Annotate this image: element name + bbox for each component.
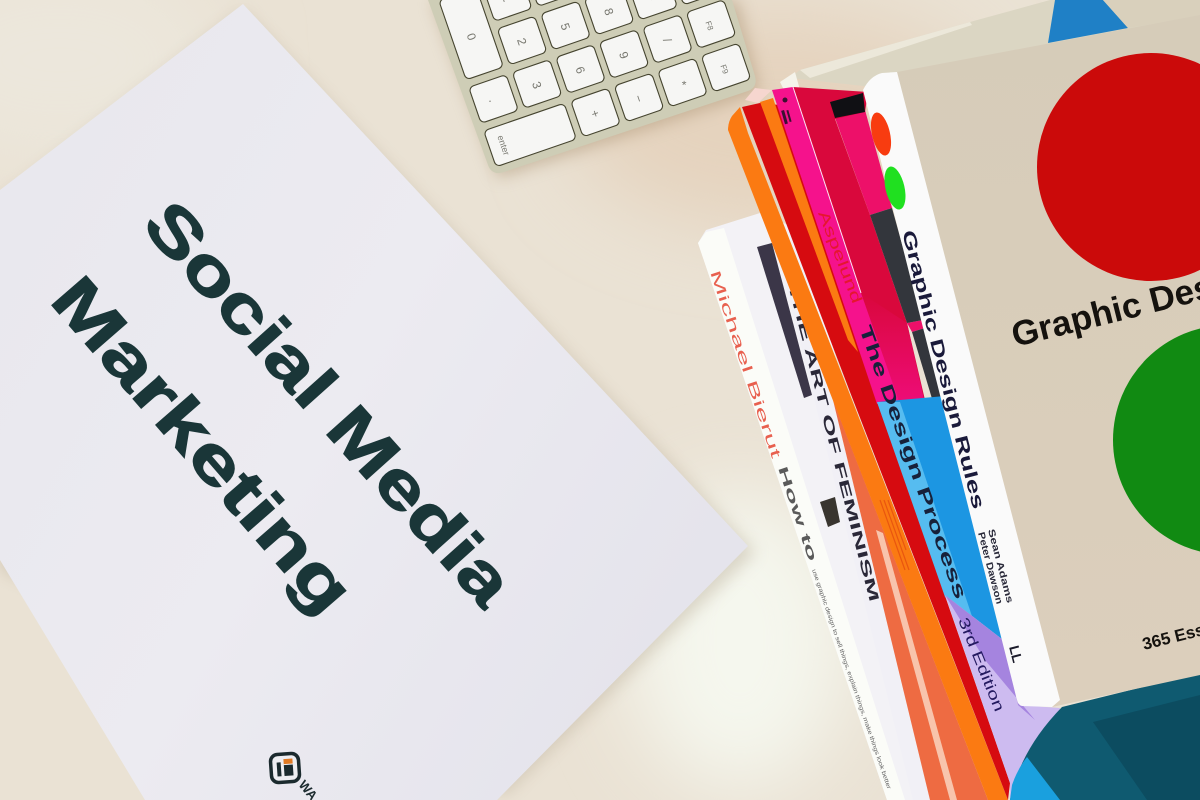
key labels: . bbox=[486, 96, 500, 104]
key labels bbox=[453, 0, 732, 157]
spine authors: Sean Adams bbox=[985, 528, 1015, 604]
spine text: 3rd Edition: 3rd Edition bbox=[954, 615, 1008, 714]
purple section bbox=[945, 595, 1060, 800]
spine title: THE ART OF FEMINISM bbox=[785, 282, 883, 603]
spine subtitle: use graphic design to sell things, explain things, make things look better bbox=[810, 569, 891, 790]
teal cover bbox=[1010, 673, 1200, 800]
coral book edge bbox=[833, 400, 988, 800]
pink cover bbox=[835, 110, 892, 215]
book: Graphic Design Rules bbox=[863, 15, 1200, 707]
back book with blue triangle bbox=[780, 0, 1200, 92]
heading: Social Media: Social Media bbox=[130, 186, 530, 621]
key labels: 6 bbox=[572, 65, 588, 76]
cover dark rectangle bbox=[757, 243, 812, 398]
book: The Design Process bbox=[772, 87, 1200, 800]
key labels: F8 bbox=[703, 20, 715, 32]
spine author: Michael Bierut bbox=[707, 268, 785, 460]
spine mark bbox=[781, 98, 792, 124]
orange book bbox=[728, 107, 1008, 800]
key labels: * bbox=[675, 79, 690, 88]
heading: Marketing: Marketing bbox=[37, 262, 369, 627]
pink spine bbox=[772, 87, 900, 404]
dark cover block lower bbox=[912, 328, 940, 398]
key labels: 0 bbox=[464, 31, 479, 42]
red shaded cover bbox=[793, 87, 925, 404]
key labels: 8 bbox=[601, 6, 617, 17]
blue triangle bbox=[1048, 0, 1128, 43]
red book bbox=[742, 88, 1010, 800]
green circle bbox=[1113, 325, 1200, 555]
key labels: 5 bbox=[558, 21, 573, 32]
pink band bbox=[907, 320, 924, 332]
lower cover bbox=[861, 293, 925, 404]
keyboard bbox=[428, 0, 760, 178]
spine authors: Peter Dawson bbox=[975, 531, 1005, 606]
key labels: enter bbox=[495, 134, 512, 157]
icon: brand logo bbox=[270, 753, 300, 783]
dark cover block upper bbox=[870, 208, 923, 323]
spine dot red bbox=[867, 111, 895, 157]
black cover block bbox=[830, 93, 865, 118]
key labels: + bbox=[587, 108, 603, 119]
key labels: − bbox=[631, 93, 646, 104]
spine title: How to bbox=[775, 464, 821, 563]
cover small dark block bbox=[820, 497, 840, 527]
key labels: / bbox=[660, 36, 675, 45]
key labels: 9 bbox=[616, 50, 631, 61]
white spine bbox=[863, 72, 1060, 707]
spine publisher mark: LL bbox=[1006, 644, 1026, 665]
spine text: Aspelund: Aspelund bbox=[814, 208, 865, 306]
red circle bbox=[1037, 53, 1200, 281]
spine text: The Design Process: The Design Process bbox=[855, 323, 971, 602]
key labels: 3 bbox=[529, 80, 545, 91]
spine authors bbox=[975, 528, 1015, 606]
desk background bbox=[558, 0, 958, 784]
key labels: F9 bbox=[718, 63, 730, 76]
paper sheet bbox=[0, 4, 756, 800]
book: The Art of Feminism bbox=[790, 291, 879, 601]
book: How to by Michael Bierut bbox=[698, 213, 930, 800]
key labels: 2 bbox=[514, 36, 530, 47]
blue section bbox=[877, 396, 1003, 640]
cover bbox=[897, 15, 1200, 707]
spine title: Graphic Design Rules bbox=[898, 228, 989, 511]
orange spine small print bbox=[880, 500, 909, 570]
spine dot green bbox=[881, 164, 909, 212]
